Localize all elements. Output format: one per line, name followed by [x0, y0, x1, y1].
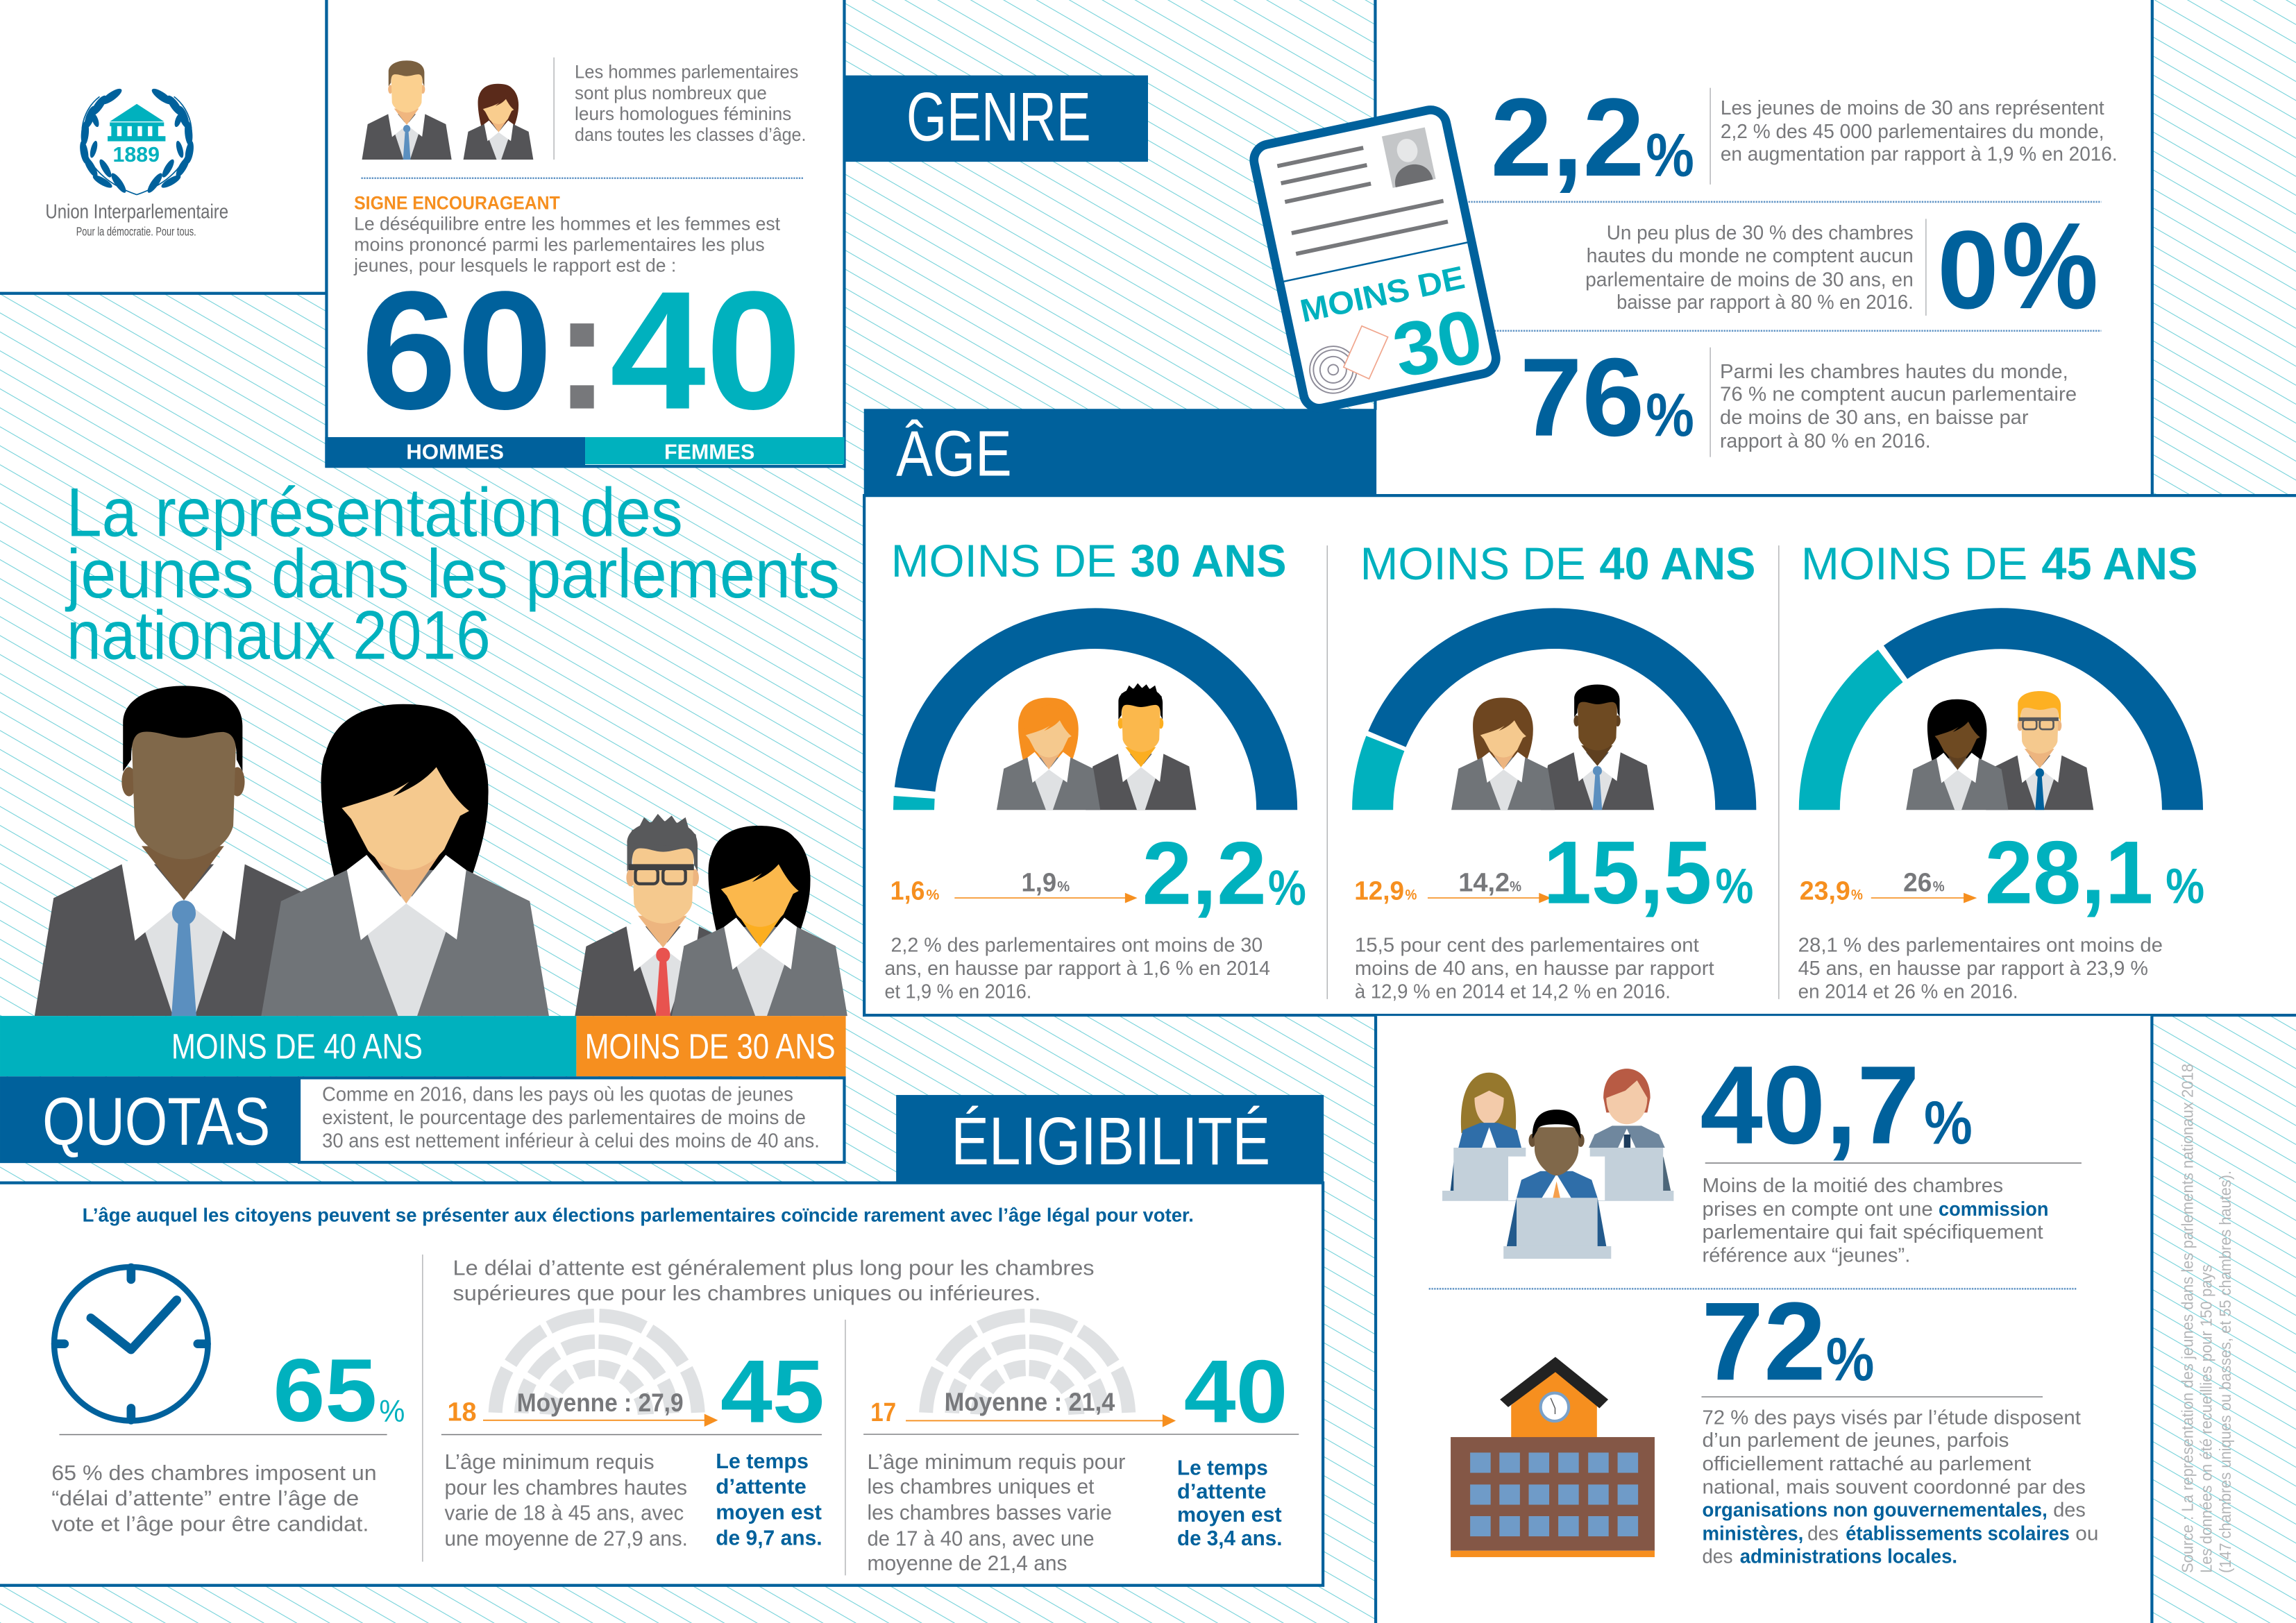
text: commission: parlementaire qui fait spécifiquement: [1703, 1221, 2043, 1243]
icon: committee of three: [1442, 1069, 1673, 1259]
panel: quotas: QUOTAS: [42, 1084, 270, 1159]
trend values: 23,9: [1800, 876, 1850, 906]
range arrow 18 to 45: 45: [720, 1343, 825, 1442]
text: L’âge minimum requis: [445, 1450, 655, 1474]
heading: 45 ANS: [2041, 538, 2197, 589]
icon: candidate card moins de 30: MOINS DE: [1297, 259, 1468, 329]
text: les chambres uniques et: [868, 1475, 1095, 1499]
trend values: 12,9: [1354, 876, 1404, 906]
logo name: Union Interparlementaire: [45, 201, 228, 223]
text: commission: prises en compte ont une: [1703, 1198, 1933, 1221]
panel: genre: [325, 0, 844, 467]
trend values: %: [1405, 887, 1417, 903]
text: quotas: existent, le pourcentage des parlementaires de moins de: [322, 1107, 806, 1129]
label bar: femmes: [585, 437, 844, 464]
text: varie de 18 à 45 ans, avec: [445, 1501, 684, 1524]
text: imbalance: Le déséquilibre entre les hommes et les femmes est: [354, 214, 781, 235]
text: youth parliaments: officiellement rattaché au parlement: [1703, 1453, 2031, 1475]
source note: Les données on été recueillies pour 150 pays: [2197, 1264, 2215, 1573]
text: [445, 1450, 688, 1551]
trend values: 14,2: [1458, 868, 1510, 897]
ratio 60:40: [361, 257, 802, 445]
text: 0% explanation: hautes du monde ne comptent aucun: [1587, 245, 1914, 267]
trend values: 1,9: [1022, 868, 1056, 897]
logo tagline: Pour la démocratie. Pour tous.: [76, 225, 196, 239]
main title: nationaux 2016: [67, 597, 491, 674]
trend values: %: [1510, 878, 1521, 894]
band: moins de 30 ans: MOINS DE 30 ANS: [585, 1027, 836, 1067]
text: 2,2 % des parlementaires ont moins de 30: [891, 935, 1263, 957]
icon: candidate card moins de 30: 30: [1386, 294, 1489, 394]
text: men outnumber women: dans toutes les classes d’âge.: [575, 124, 806, 145]
text: youth parliaments: ministères,: [1703, 1522, 1803, 1545]
text: youth parliaments: ou: [2075, 1522, 2098, 1545]
text: commission: Moins de la moitié des chambres: [1703, 1175, 2003, 1197]
trend values: [890, 824, 1306, 924]
text: 2,2% explanation: 2,2 % des 45 000 parlementaires du monde,: [1721, 121, 2104, 143]
stat: 40,7%: %: [1924, 1089, 1973, 1157]
icon: hemicycle: [496, 1316, 698, 1414]
trend values: 1,6: [890, 876, 925, 906]
heading: [891, 536, 1287, 586]
text: 0% explanation: [1585, 222, 1914, 314]
text: 65%: [51, 1461, 377, 1536]
label bar: femmes: FEMMES: [664, 441, 754, 464]
ratio 60:40: :: [554, 257, 610, 445]
text: ans, en hausse par rapport à 1,6 % en 2014: [884, 958, 1270, 980]
text: imbalance: [353, 214, 781, 276]
stat: 40,7%: 40,7: [1700, 1043, 1920, 1167]
trend values: %: [1933, 878, 1945, 894]
text: imbalance: jeunes, pour lesquels le rapport est de :: [353, 255, 676, 276]
heading: 30 ANS: [1131, 536, 1287, 586]
panel: logo: [0, 0, 326, 294]
text: quotas: 30 ans est nettement inférieur à celui des moins de 40 ans.: [322, 1130, 820, 1152]
range arrow 18 to 45: [448, 1343, 825, 1442]
stat: 65%: 65: [273, 1341, 377, 1441]
icon: two parliamentarians: [997, 683, 1196, 810]
heading: signe encourageant: SIGNE ENCOURAGEANT: [354, 192, 560, 213]
ratio 60:40: 60: [361, 257, 552, 445]
main title: jeunes dans les parlements: [65, 536, 840, 613]
label: average: Moyenne : 21,4: [945, 1388, 1115, 1416]
text: men outnumber women: sont plus nombreux que: [575, 83, 767, 103]
text: average wait: de 3,4 ans.: [1177, 1527, 1282, 1550]
text: en 2014 et 26 % en 2016.: [1798, 980, 2018, 1003]
icon: two parliamentarians: [1451, 685, 1654, 810]
range arrow 18 to 45: 18: [448, 1398, 477, 1427]
ratio 60:40: 40: [610, 257, 802, 445]
text: 76% explanation: Parmi les chambres hautes du monde,: [1720, 361, 2068, 383]
panel: under 30 stats: [1375, 0, 2152, 495]
text: average wait: d’attente: [716, 1475, 807, 1499]
trend values: [1354, 824, 1753, 923]
text: 76% explanation: rapport à 80 % en 2016.: [1720, 430, 1931, 452]
trend values: %: [1057, 878, 1070, 894]
text: moins de 40 ans, en hausse par rapport: [1355, 958, 1714, 980]
text: 15,5 pour cent des parlementaires ont: [1355, 935, 1699, 957]
text: average wait: moyen est: [716, 1501, 822, 1524]
text: average wait: d’attente: [1177, 1480, 1266, 1504]
column: moins de 45 ans: [1798, 538, 2204, 1003]
text: waiting time: supérieures que pour les chambres uniques ou inférieures.: [453, 1282, 1040, 1305]
text: average wait: Le temps: [716, 1450, 809, 1473]
text: [1355, 935, 1714, 1003]
stat: 0%: %: [2002, 197, 2098, 334]
text: youth parliaments: des: [2053, 1499, 2086, 1522]
icon: candidate card moins de 30: [1251, 107, 1500, 415]
illustration: under 40 parliamentarians: [35, 686, 549, 1016]
trend values: %: [1268, 860, 1306, 916]
text: 65%: vote et l’âge pour être candidat.: [51, 1513, 369, 1536]
text: youth parliaments: des: [1807, 1522, 1839, 1545]
panel: age: [864, 495, 2296, 1015]
text: pour les chambres hautes: [445, 1476, 687, 1499]
section tab: genre: GENRE: [906, 79, 1091, 156]
stat: 72%: 72: [1701, 1279, 1826, 1403]
heading: MOINS DE: [1801, 538, 2027, 589]
label bar: hommes: HOMMES: [406, 441, 504, 464]
range arrow 17 to 40: [870, 1343, 1288, 1442]
stat: 76%: 76: [1520, 335, 1644, 459]
text: les chambres basses varie: [868, 1501, 1112, 1524]
text: 65%: “délai d’attente” entre l’âge de: [51, 1487, 359, 1511]
gauge: [1799, 608, 2203, 810]
text: une moyenne de 27,9 ans.: [445, 1527, 688, 1551]
text: 45 ans, en hausse par rapport à 23,9 %: [1798, 958, 2148, 980]
heading: [1360, 538, 1756, 589]
trend values: 26: [1903, 868, 1932, 897]
text: [884, 935, 1270, 1003]
text: de 17 à 40 ans, avec une: [868, 1527, 1095, 1550]
text: L’âge minimum requis pour: [868, 1450, 1126, 1474]
range arrow 17 to 40: 40: [1184, 1343, 1288, 1442]
text: 76% explanation: 76 % ne comptent aucun parlementaire: [1720, 384, 2077, 406]
text: average wait: moyen est: [1177, 1503, 1282, 1527]
label bar: hommes: [325, 437, 585, 467]
gauge: [1352, 608, 1756, 810]
text: waiting time: [453, 1257, 1095, 1305]
trend values: 15,5: [1544, 824, 1712, 923]
column: moins de 40 ans: [1352, 538, 1756, 1003]
trend values: 2,2: [1142, 824, 1267, 924]
panel: committees and youth parliaments: [1376, 1016, 2152, 1623]
text: commission: [1703, 1175, 2048, 1267]
source note: Source : La représentation des jeunes dans les parlements nationaux 2018: [2179, 1064, 2197, 1573]
range arrow 17 to 40: 17: [870, 1398, 896, 1427]
heading: MOINS DE: [1360, 538, 1586, 589]
text: average wait: de 9,7 ans.: [716, 1526, 822, 1549]
text: 0% explanation: parlementaire de moins de 30 ans, en: [1585, 269, 1914, 291]
section tab: age: [864, 409, 1376, 496]
trend values: %: [2166, 859, 2204, 915]
main title: [65, 475, 840, 674]
heading text: L’âge auquel les citoyens peuvent se présenter aux élections parlementaires coïncide rarement avec l’âge légal pour voter.: [83, 1205, 1194, 1226]
stat: 0%: 0: [1937, 207, 1999, 332]
text: 65%: 65 % des chambres imposent un: [51, 1461, 377, 1485]
text: 76% explanation: [1720, 361, 2077, 452]
stat: 2,2%: 2,2: [1491, 75, 1644, 199]
stat: 2,2%: %: [1646, 121, 1694, 189]
icon: clock: [54, 1267, 208, 1420]
text: youth parliaments: [1703, 1407, 2098, 1567]
text: 0% explanation: Un peu plus de 30 % des chambres: [1607, 222, 1914, 244]
stat: 72%: %: [1826, 1325, 1874, 1393]
text: [868, 1450, 1126, 1575]
text: youth parliaments: national, mais souvent coordonné par des: [1703, 1477, 2086, 1499]
block: chambres hautes: [441, 1316, 825, 1551]
text: et 1,9 % en 2016.: [884, 980, 1031, 1003]
heading: 40 ANS: [1599, 538, 1756, 589]
text: 0% explanation: baisse par rapport à 80 % en 2016.: [1617, 291, 1914, 314]
text: average wait: [1177, 1456, 1282, 1550]
heading: MOINS DE: [891, 536, 1117, 586]
text: average wait: Le temps: [1177, 1456, 1268, 1480]
section tab: age: ÂGE: [896, 418, 1012, 490]
text: quotas: [322, 1084, 820, 1152]
block: chambres uniques et basses: [863, 1316, 1299, 1575]
label: average: Moyenne : 27,9: [517, 1388, 684, 1417]
text: youth parliaments: d’un parlement de jeunes, parfois: [1703, 1429, 2009, 1452]
text: 2,2% explanation: Les jeunes de moins de 30 ans représentent: [1721, 97, 2104, 119]
text: youth parliaments: 72 % des pays visés par l’étude disposent: [1703, 1407, 2081, 1429]
text: à 12,9 % en 2014 et 14,2 % en 2016.: [1355, 980, 1671, 1003]
band: moins de 30 ans: [576, 1016, 846, 1076]
illustration: under 30 parliamentarians: [575, 814, 847, 1016]
text: 28,1 % des parlementaires ont moins de: [1798, 935, 2163, 957]
icon: man and woman: [362, 60, 533, 160]
text: [1798, 935, 2163, 1003]
text: youth parliaments: des: [1703, 1545, 1733, 1567]
text: youth parliaments: administrations locales.: [1740, 1545, 1957, 1567]
stat: 76%: %: [1646, 381, 1694, 450]
text: men outnumber women: Les hommes parlementaires: [575, 61, 798, 82]
trend values: [1800, 824, 2204, 923]
text: commission: commission: [1939, 1198, 2048, 1221]
heading: [1801, 538, 2197, 589]
icon: IPU wreath logo: [78, 86, 195, 195]
column: moins de 30 ans: [884, 536, 1306, 1003]
text: 2,2% explanation: [1721, 97, 2118, 166]
trend values: 28,1: [1985, 824, 2153, 923]
text: quotas: Comme en 2016, dans les pays où les quotas de jeunes: [322, 1084, 793, 1106]
main title: La représentation des: [67, 475, 683, 552]
text: men outnumber women: [575, 61, 806, 145]
text: men outnumber women: leurs homologues féminins: [575, 103, 791, 124]
text: imbalance: moins prononcé parmi les parlementaires les plus: [354, 235, 765, 255]
text: average wait: [716, 1450, 822, 1549]
text: waiting time: Le délai d’attente est généralement plus long pour les chambres: [453, 1257, 1095, 1280]
gauge: [893, 608, 1297, 810]
icon: school building: [1451, 1357, 1655, 1557]
text: 2,2% explanation: en augmentation par rapport à 1,9 % en 2016.: [1721, 144, 2118, 166]
stat: 0%: [1937, 197, 2098, 334]
text: commission: référence aux “jeunes”.: [1703, 1245, 1910, 1267]
band: moins de 40 ans: MOINS DE 40 ANS: [171, 1027, 423, 1067]
icon: two parliamentarians: [1906, 691, 2093, 810]
source note: [2179, 1064, 2234, 1573]
trend values: %: [1851, 887, 1863, 903]
text: youth parliaments: établissements scolaires: [1846, 1522, 2070, 1545]
panel: quotas: [0, 1076, 844, 1163]
text: 76% explanation: de moins de 30 ans, en baisse par: [1720, 407, 2029, 429]
panel: eligibilite: [0, 1183, 1323, 1586]
icon: IPU wreath logo: 1889: [112, 143, 160, 167]
source note: (147 chambres uniques ou basses, et 55 chambres hautes).: [2216, 1171, 2234, 1573]
trend values: %: [926, 887, 940, 903]
icon: hemicycle: [926, 1316, 1129, 1414]
text: youth parliaments: organisations non gouvernementales,: [1703, 1499, 2048, 1522]
band: moins de 40 ans: [0, 1016, 576, 1076]
trend values: %: [1716, 859, 1753, 915]
text: moyenne de 21,4 ans: [868, 1552, 1067, 1575]
stat: 65%: %: [379, 1394, 405, 1428]
section tab: eligibilite: ÉLIGIBILITÉ: [951, 1103, 1270, 1179]
